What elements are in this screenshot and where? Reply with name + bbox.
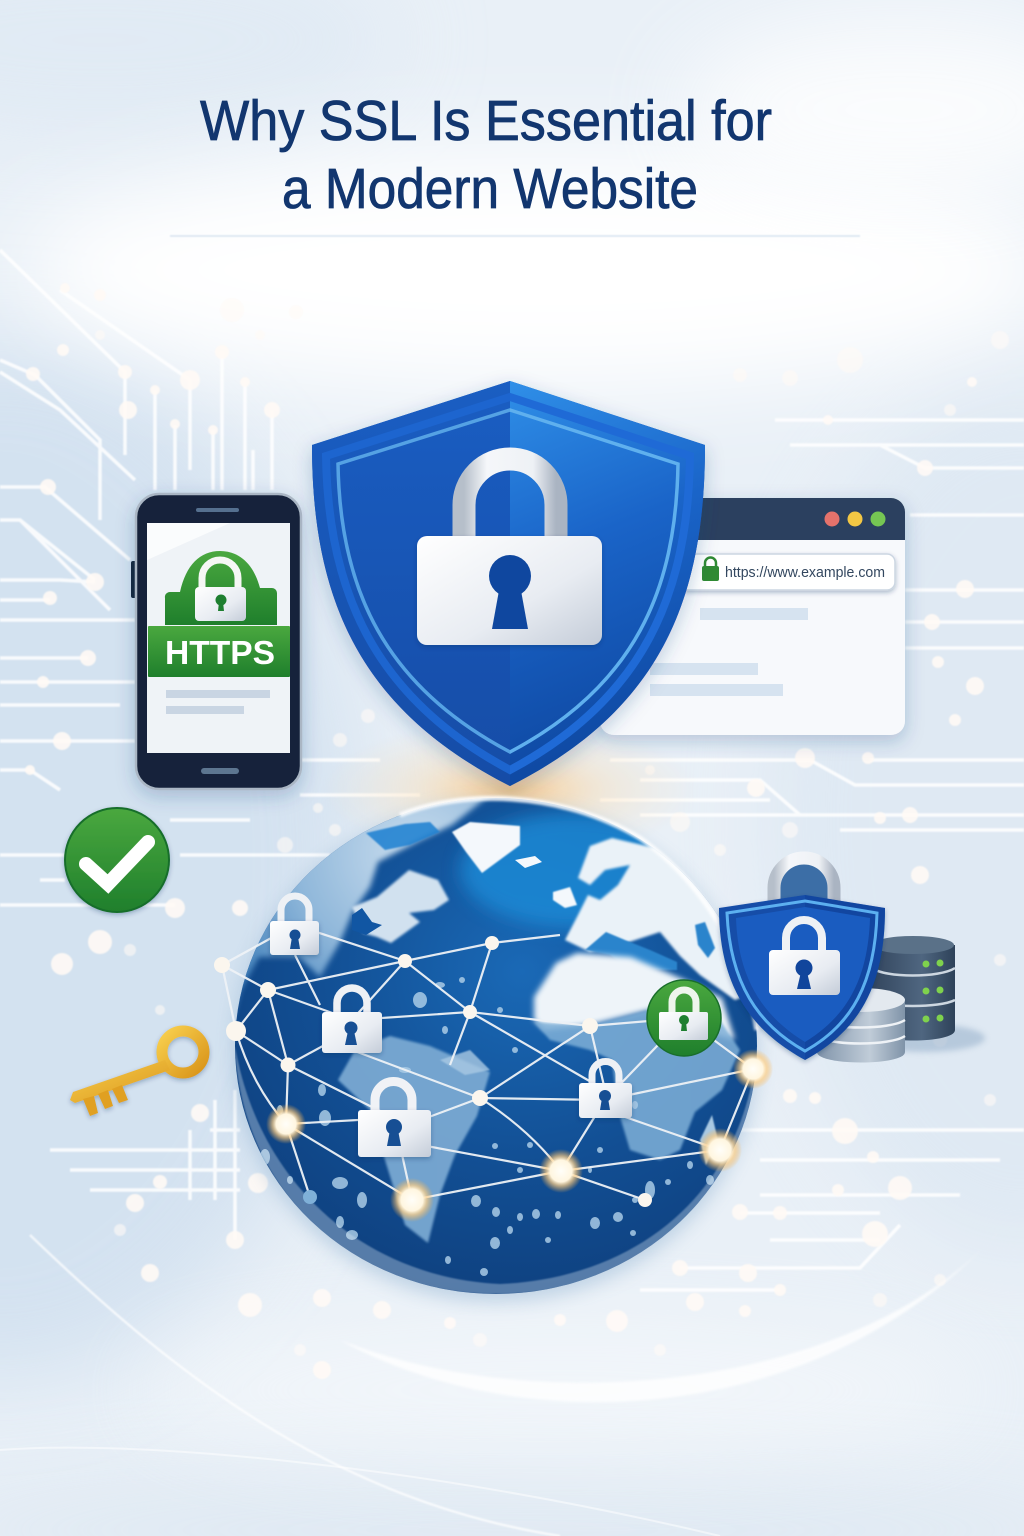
- green check badge: [65, 808, 169, 912]
- title: a Modern Website: [282, 157, 698, 221]
- dark server stack: [872, 936, 955, 1040]
- browser window: [600, 498, 905, 735]
- database servers: [817, 936, 985, 1062]
- great lakes: [352, 908, 382, 935]
- phone screen: HTTPS: [165, 634, 275, 671]
- bottom and right vignette: [235, 1046, 757, 1294]
- golden key: [70, 1031, 204, 1116]
- warm glow under shield: [320, 720, 700, 860]
- light server stack: [817, 988, 905, 1062]
- sahara: [534, 953, 735, 1040]
- title: [200, 89, 772, 221]
- south america: [338, 1036, 490, 1243]
- smartphone: [131, 494, 301, 789]
- padlock left: [322, 988, 382, 1053]
- left pale cap: [238, 798, 488, 1010]
- main padlock: [417, 459, 602, 645]
- page content lines: [650, 608, 808, 696]
- network nodes: [214, 936, 773, 1222]
- green padlock badge: [647, 980, 721, 1056]
- mediterranean: [585, 932, 677, 970]
- globe rim highlight: [400, 798, 757, 1030]
- eurasia: [565, 838, 762, 1000]
- browser window buttons: [824, 512, 886, 526]
- north america east: [352, 870, 449, 943]
- green lock badge: [165, 551, 277, 625]
- padlock right: [579, 1062, 632, 1118]
- circuit lines: left: [0, 250, 420, 1240]
- large padlock: [358, 1082, 431, 1157]
- small shield with padlock: [719, 858, 885, 1060]
- arctic islands: [366, 822, 440, 850]
- small padlock top left: [270, 896, 319, 955]
- address bar: https://www.example.com: [725, 565, 885, 581]
- circuit dots and bokeh: [25, 283, 1009, 1379]
- central and southern africa: [534, 1010, 740, 1160]
- circuit lines: right: [600, 420, 1024, 1290]
- phone screen: [147, 523, 290, 753]
- light speckle over ocean: [260, 977, 714, 1276]
- HTTPS banner: [148, 626, 290, 677]
- address bar: [680, 554, 895, 590]
- browser title bar: [650, 498, 905, 540]
- title: Why SSL Is Essential for: [200, 89, 772, 153]
- globe: [225, 790, 762, 1302]
- bright water band: [460, 812, 690, 928]
- network lines: [222, 925, 753, 1200]
- caribbean patch: [440, 1050, 490, 1075]
- greenland: [452, 822, 520, 873]
- main shield: [312, 381, 705, 786]
